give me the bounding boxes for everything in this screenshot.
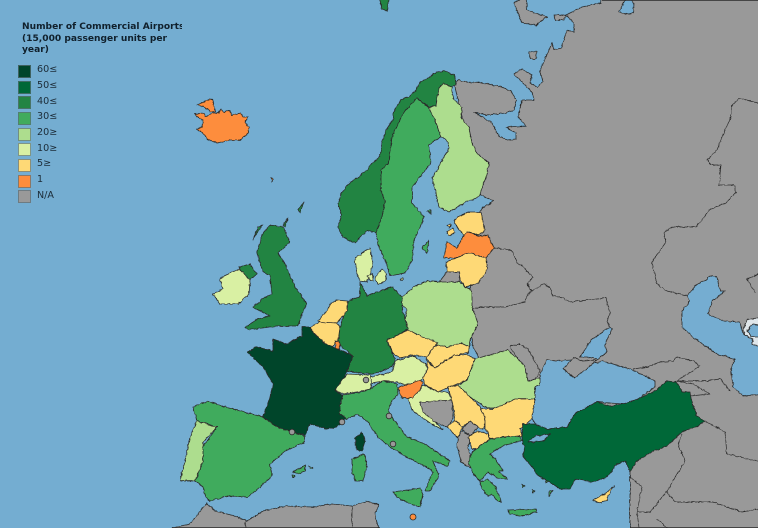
map frame lines on land at the image edges [172, 0, 758, 528]
Cyprus [593, 486, 614, 503]
Kosovo [462, 421, 478, 436]
legend entry: 5 or fewer [18, 158, 51, 172]
Kara-Bogaz lagoon [743, 317, 758, 348]
legend entry: 50 or more [18, 80, 57, 94]
Crimea [563, 357, 597, 378]
North Africa [165, 501, 380, 528]
legend entry: 30 or more: 30≤ [37, 111, 57, 122]
national borders of non-data countries [472, 98, 758, 528]
Northern Ireland [239, 264, 257, 280]
legend entry: no data: N/A [37, 190, 54, 200]
Luxembourg [335, 341, 340, 349]
Sea of Marmara [528, 434, 550, 442]
Austria [370, 356, 428, 386]
Poland [402, 281, 478, 347]
legend entry: 20 or fewer: 20≥ [37, 127, 57, 138]
small-state markers [289, 377, 396, 447]
Faroe Islands [271, 177, 273, 182]
Albania [457, 431, 473, 468]
Ireland [213, 269, 250, 304]
Czech Republic [387, 330, 438, 358]
legend entry: 30 or more [18, 111, 57, 125]
Netherlands [318, 300, 347, 325]
legend entry: 20 or fewer [18, 127, 57, 141]
Hungary [423, 355, 475, 392]
Black Sea [532, 359, 655, 429]
Iceland [195, 99, 249, 143]
Lithuania [446, 253, 487, 287]
Slovakia [426, 343, 470, 368]
Montenegro [447, 420, 462, 438]
legend entry: 1: 1 [37, 174, 43, 185]
Switzerland [335, 374, 372, 394]
Kaliningrad [440, 272, 460, 283]
Belgium [310, 322, 340, 347]
countries and seas [165, 0, 758, 528]
Bulgaria [480, 399, 535, 439]
Serbia [448, 385, 487, 430]
non-data land: Russia and eastern neighbours [454, 0, 758, 528]
Great Britain [245, 202, 307, 330]
legend entry: 60 or more: 60≤ [37, 64, 57, 75]
Slovenia [398, 380, 423, 398]
France [247, 327, 365, 451]
legend [18, 22, 182, 203]
Latvia [444, 232, 494, 258]
Svalbard [379, 0, 389, 11]
legend entry: no data [18, 190, 54, 203]
Gotland [422, 240, 429, 253]
Caspian Sea [682, 276, 758, 396]
Estonia [447, 212, 485, 236]
legend entry: 50 or more: 50≤ [37, 80, 57, 91]
legend entry: 10 or fewer: 10≥ [37, 142, 57, 154]
Denmark [355, 248, 403, 284]
Sweden [376, 98, 441, 276]
legend title: Number of Commercial Airports (15,000 passenger units per year) [22, 22, 182, 55]
legend entry: 40 or more [18, 96, 57, 109]
Italy [340, 381, 450, 507]
Sea of Azov [580, 327, 612, 359]
Croatia [408, 385, 452, 430]
Malta [410, 514, 416, 520]
Aland Islands [427, 210, 431, 214]
legend entry: 1 [18, 174, 43, 188]
Greece [468, 436, 553, 516]
legend entry: 5 or fewer: 5≥ [37, 158, 51, 169]
Romania [458, 350, 540, 408]
Finland [417, 83, 489, 212]
legend entry: 10 or fewer [18, 142, 57, 156]
inlet: north coast [619, 0, 634, 14]
Bosnia and Herzegovina [420, 400, 453, 427]
legend entry: 60 or more [18, 64, 57, 78]
Germany [338, 282, 408, 374]
Portugal [180, 421, 217, 481]
legend entry: 40 or more: 40≤ [37, 96, 57, 106]
Spain [193, 401, 313, 501]
Norway [338, 71, 456, 243]
Turkey [522, 381, 705, 489]
North Macedonia [468, 431, 490, 449]
